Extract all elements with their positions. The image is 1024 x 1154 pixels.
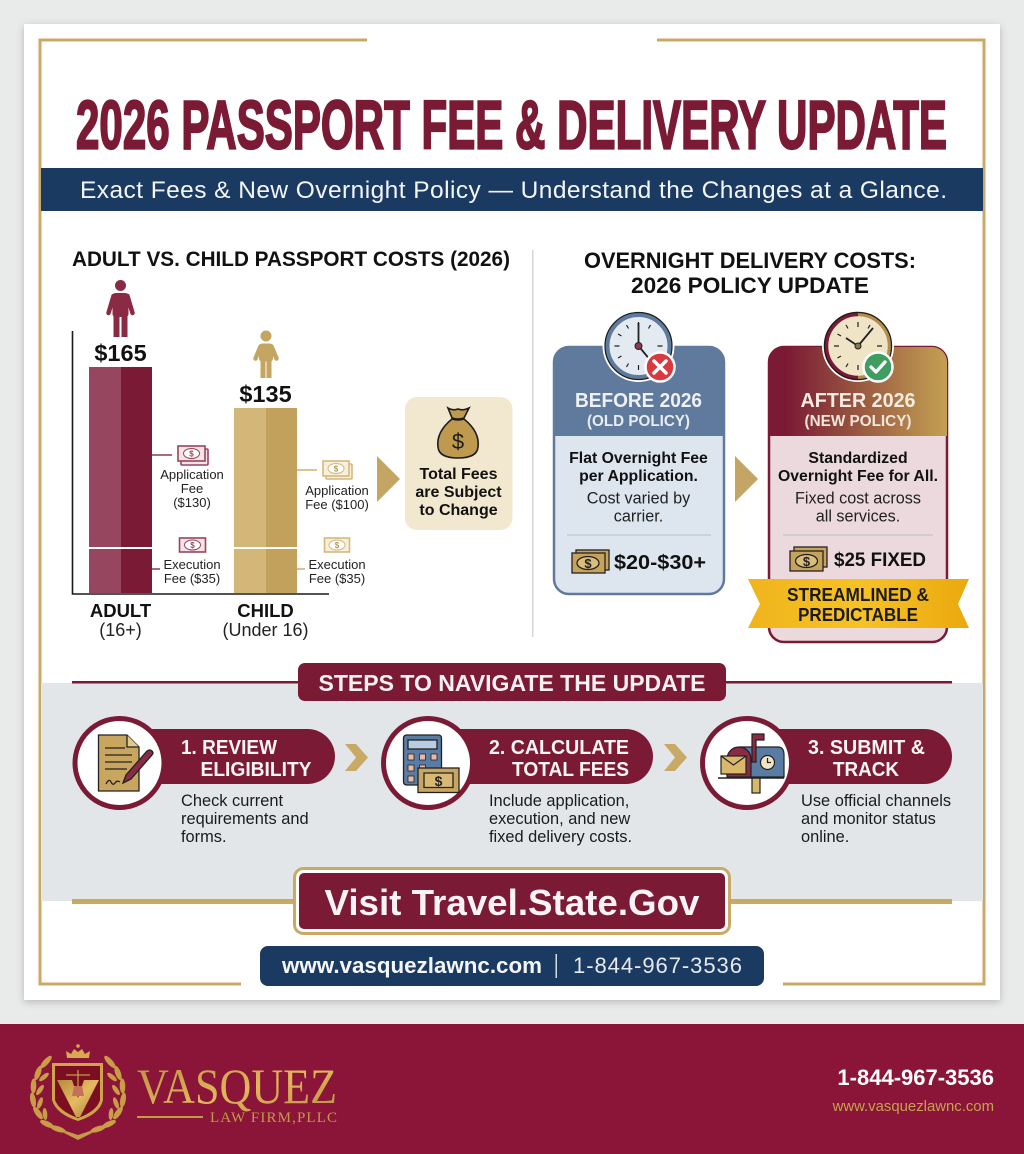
step 2: calculate total fees: execution, and new	[489, 810, 630, 828]
heading: passport costs: ADULT VS. CHILD PASSPORT COSTS (2026)	[72, 247, 510, 271]
v mark	[57, 1080, 99, 1117]
panel: overnight delivery costs	[554, 248, 969, 642]
card: after 2026: Overnight Fee for All.	[778, 468, 938, 485]
gold frame	[40, 40, 984, 984]
icon: child execution money: $	[335, 541, 340, 550]
card: after 2026: (NEW POLICY)	[804, 413, 912, 430]
laurel left	[29, 1054, 66, 1134]
card: after 2026: Fixed cost across	[795, 490, 921, 508]
step 1: review eligibility: ELIGIBILITY	[200, 758, 312, 781]
arrow	[377, 456, 400, 502]
step 3: submit and track: and monitor status	[801, 810, 936, 828]
step 3: submit and track: TRACK	[833, 758, 899, 781]
subtitle band: Exact Fees & New Overnight Policy — Understand the Changes at a Glance.	[80, 177, 947, 204]
step 2: calculate total fees: 2. CALCULATE	[489, 736, 629, 759]
card: after 2026: Standardized	[808, 450, 908, 467]
step 2: calculate total fees: TOTAL FEES	[512, 758, 629, 781]
crown	[66, 1049, 90, 1058]
icon: old clock	[602, 310, 674, 382]
step 3: submit and track: 3. SUBMIT &	[808, 736, 925, 759]
step 2: calculate total fees: Include application,	[489, 792, 629, 810]
card: before 2026: Flat Overnight Fee	[569, 450, 708, 467]
heading: overnight delivery: OVERNIGHT DELIVERY COSTS:	[584, 248, 916, 273]
icon: child application money	[323, 461, 352, 479]
adult application fee label: Application	[160, 467, 224, 482]
icon: document and pen	[98, 735, 153, 791]
bar chart: $135	[239, 381, 292, 407]
arrow	[735, 456, 758, 502]
heading: overnight delivery: 2026 POLICY UPDATE	[631, 273, 869, 298]
step 1: review eligibility: Check current	[181, 792, 283, 810]
icon: money bag: $	[452, 429, 464, 454]
arrow: chevron 2	[664, 744, 687, 771]
laurel right	[90, 1054, 127, 1134]
logo wordmark: VASQUEZ	[137, 1058, 337, 1114]
contact pill: www.vasquezlawnc.com	[281, 953, 542, 978]
icon: law firm crest	[29, 1044, 127, 1140]
callout: total fees subject to change: to Change	[419, 502, 498, 519]
icon: money: $	[584, 556, 592, 571]
step 1: review eligibility: forms.	[181, 828, 227, 846]
footer website: www.vasquezlawnc.com	[832, 1099, 994, 1115]
contact pill	[260, 946, 764, 986]
bar chart	[72, 331, 329, 640]
card: after 2026: all services.	[816, 508, 900, 526]
step 3: submit and track: Use official channels	[801, 792, 951, 810]
bar chart: CHILD	[237, 600, 294, 621]
icon: child figure	[256, 330, 276, 378]
card: after 2026: AFTER 2026	[800, 390, 916, 412]
step 3: submit and track: online.	[801, 828, 849, 846]
ribbon: streamlined and predictable	[748, 579, 969, 628]
panel: steps	[41, 663, 983, 901]
card: before 2026: Cost varied by	[587, 490, 691, 508]
call to action: visit travel.state.gov	[72, 868, 952, 934]
ribbon: streamlined and predictable: STREAMLINED &	[787, 585, 929, 605]
panel: adult vs child passport costs	[72, 247, 512, 640]
step 2: calculate total fees	[384, 718, 653, 846]
icon: new clock	[822, 310, 894, 382]
icon: money	[790, 547, 827, 571]
adult application fee label: ($130)	[173, 495, 211, 510]
callout: total fees subject to change	[405, 397, 512, 530]
step 1: review eligibility: 1. REVIEW	[181, 736, 278, 759]
child execution fee label: Execution	[308, 557, 366, 572]
callout: total fees subject to change: are Subject	[415, 484, 502, 501]
adult execution fee label: Fee ($35)	[164, 571, 220, 586]
card: after 2026: $25 FIXED	[834, 549, 926, 571]
logo subline: LAW FIRM,PLLC	[210, 1110, 337, 1126]
step 1: review eligibility: requirements and	[181, 810, 309, 828]
icon: adult application money: $	[189, 450, 194, 458]
step 1: review eligibility	[75, 718, 335, 846]
adult application fee label: Fee	[181, 481, 203, 496]
icon: adult figure	[108, 280, 132, 337]
child application fee label: Application	[305, 483, 369, 498]
icon: calculator and money: $	[435, 773, 443, 789]
card: after 2026	[748, 310, 969, 642]
bar chart: (Under 16)	[222, 620, 309, 640]
bar chart: $165	[94, 340, 147, 366]
step 2: calculate total fees: fixed delivery costs.	[489, 828, 632, 846]
icon: money	[572, 550, 609, 573]
footer	[0, 1024, 1024, 1154]
card: before 2026: per Application.	[579, 468, 698, 485]
shield	[52, 1063, 103, 1121]
icon: calculator and money	[404, 735, 459, 792]
ribbon: streamlined and predictable: PREDICTABLE	[798, 605, 918, 625]
icon: green check badge	[864, 352, 892, 382]
icon: red x badge	[646, 352, 674, 382]
contact pill: 1-844-967-3536	[573, 953, 742, 978]
subtitle band	[41, 168, 983, 211]
call to action: visit travel.state.gov: Visit Travel.State.Gov	[324, 882, 700, 923]
footer phone: 1-844-967-3536	[837, 1065, 994, 1090]
icon: mailbox	[718, 734, 784, 793]
icon: money: $	[803, 554, 811, 569]
card: before 2026: BEFORE 2026	[575, 390, 702, 412]
icon: child application money: $	[334, 464, 339, 474]
icon: adult execution money	[180, 538, 206, 552]
card: before 2026: (OLD POLICY)	[587, 413, 690, 430]
heading: steps: STEPS TO NAVIGATE THE UPDATE	[318, 670, 706, 696]
icon: child execution money	[324, 538, 350, 552]
card: before 2026	[554, 310, 724, 594]
center divider	[532, 250, 534, 637]
bar chart: (16+)	[99, 620, 142, 640]
arrow: chevron 1	[345, 744, 368, 771]
card: before 2026: $20-$30+	[614, 552, 706, 574]
heading: steps	[298, 663, 726, 701]
bar chart: ADULT	[90, 600, 152, 621]
step 3: submit and track	[702, 718, 952, 846]
child application fee label: Fee ($100)	[305, 497, 369, 512]
icon: adult application money	[178, 446, 208, 465]
child execution fee label: Fee ($35)	[309, 571, 365, 586]
adult execution fee label: Execution	[163, 557, 221, 572]
callout: total fees subject to change: Total Fees	[420, 466, 498, 483]
card: before 2026: carrier.	[614, 508, 663, 526]
icon: adult execution money: $	[190, 541, 195, 550]
